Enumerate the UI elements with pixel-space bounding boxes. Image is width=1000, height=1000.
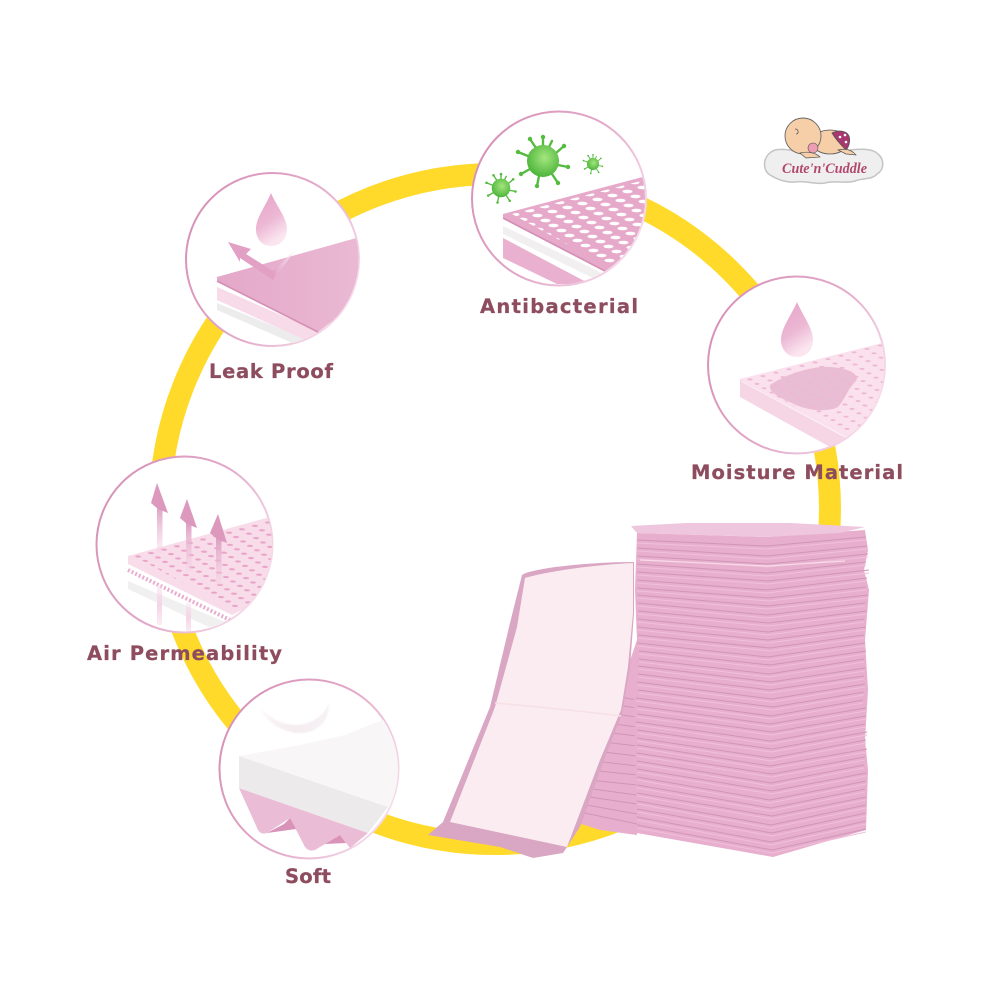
water drop: [256, 193, 287, 246]
bundle gap: [640, 560, 845, 566]
brand logo: [765, 118, 883, 183]
moisture circle: [708, 276, 885, 454]
deflected arrow: [228, 242, 298, 280]
air arrows: [151, 483, 227, 585]
yellow ring: [160, 174, 830, 844]
pad fold: [495, 703, 621, 716]
panel: moisture material: [708, 276, 890, 454]
pad border: [428, 562, 634, 858]
antibacterial circle: [472, 112, 646, 286]
panel: antibacterial: [472, 112, 650, 286]
moisture sheet: [740, 341, 890, 447]
panel: soft: [220, 680, 400, 858]
panel: air permeability: [96, 456, 280, 633]
antibacterial layers: [503, 175, 650, 284]
leak proof label: Leak Proof: [209, 360, 334, 383]
sheet edges: [636, 537, 869, 850]
leak proof circle: [186, 173, 359, 346]
leaning pad: [428, 562, 634, 858]
soft circle: [220, 680, 398, 858]
sheet highlights: [636, 540, 869, 853]
logo baby: [785, 118, 856, 158]
water drop: [781, 302, 813, 357]
panel: leak proof: [186, 173, 360, 346]
logo wordmark: Cute'n'Cuddle: [782, 161, 867, 177]
main stack: [631, 523, 869, 857]
logo cloud: [765, 149, 883, 183]
moisture stain: [770, 367, 857, 410]
rear stack: [570, 640, 637, 835]
moisture label: Moisture Material: [691, 461, 903, 484]
viruses: [485, 135, 603, 204]
product: pad stacks: [428, 523, 869, 858]
leak proof layers: [217, 237, 360, 345]
air permeability label: Air Permeability: [87, 642, 282, 665]
pad absorbent surface: [450, 563, 633, 847]
air circle: [96, 456, 272, 632]
soft layers: [239, 720, 400, 851]
soft label: Soft: [285, 865, 331, 888]
air layers: [128, 514, 280, 633]
stack body: [634, 530, 869, 857]
feather: [260, 703, 329, 733]
top sheet: [631, 523, 865, 537]
antibacterial label: Antibacterial: [480, 295, 638, 318]
